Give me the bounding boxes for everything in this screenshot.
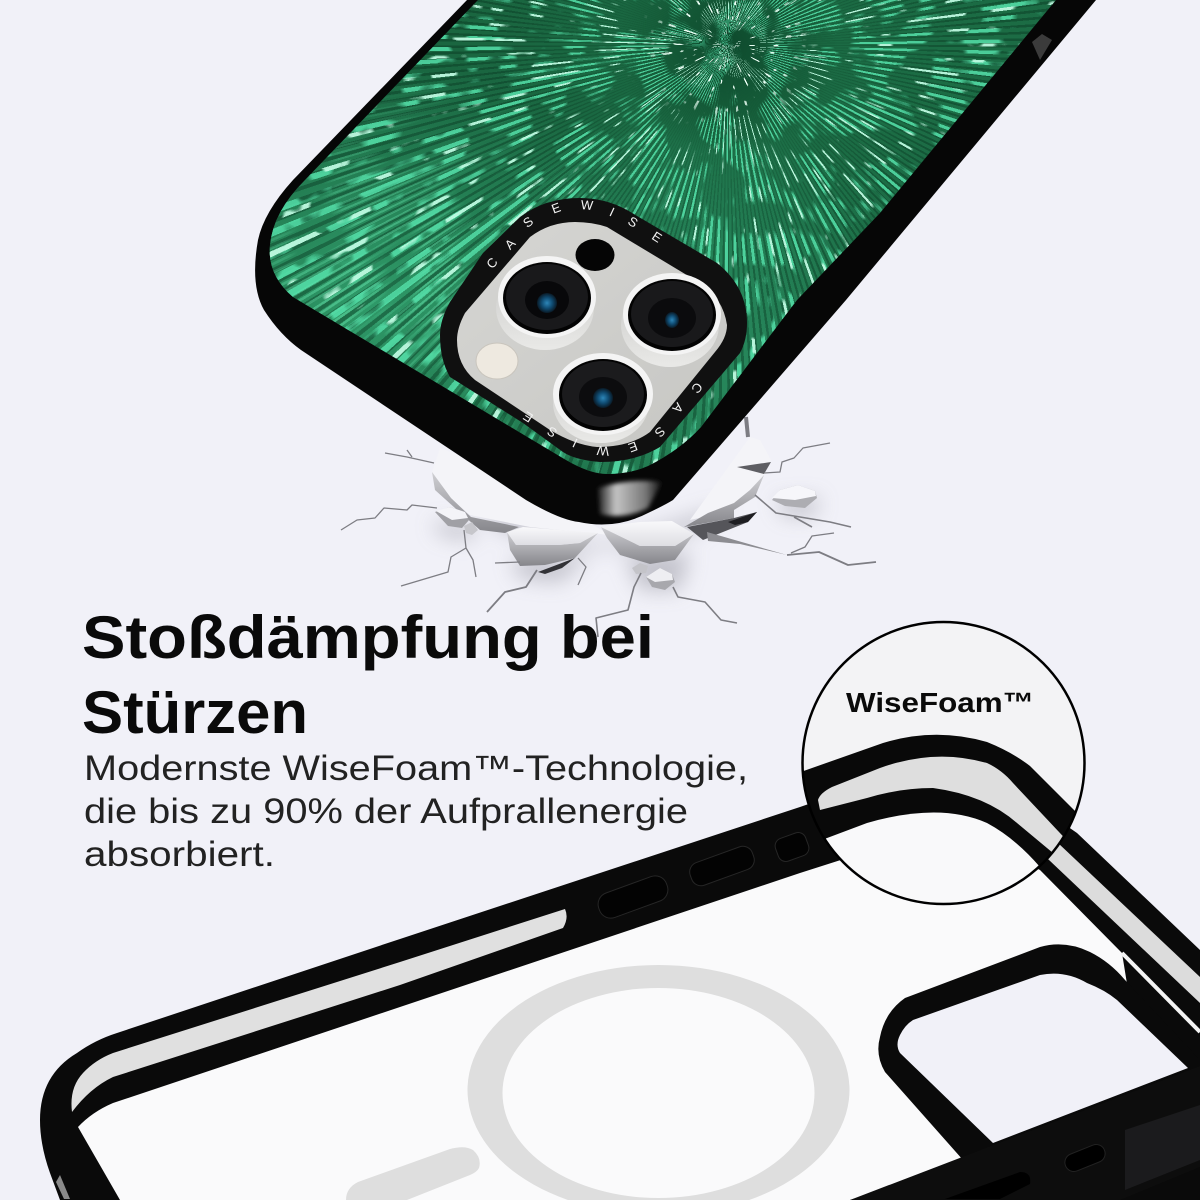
bottom frame band bbox=[850, 1066, 1200, 1200]
phone with green case, seen from the back bbox=[255, 0, 1096, 524]
body text: die bis zu 90% der Aufprallenergie bbox=[84, 792, 688, 831]
microphone hole and flash bbox=[476, 239, 614, 379]
CASEWISE ring lettering: E bbox=[626, 438, 640, 456]
clear back panel bbox=[78, 825, 1190, 1200]
raised wall plates bbox=[432, 437, 771, 535]
cracked wall impact bbox=[340, 416, 876, 638]
lens: right bbox=[621, 273, 721, 367]
bumper bbox=[440, 198, 747, 462]
CASEWISE ring lettering: C bbox=[688, 380, 706, 396]
CASEWISE ring lettering: A bbox=[502, 235, 519, 252]
white highlight along inner frame bbox=[1122, 953, 1200, 1032]
body text bbox=[84, 749, 748, 874]
CASEWISE ring lettering: S bbox=[520, 213, 536, 231]
alignment pill bbox=[346, 1147, 480, 1200]
CASEWISE ring lettering bbox=[483, 197, 706, 459]
CASEWISE ring lettering: A bbox=[669, 400, 687, 416]
clear case, inside view bbox=[40, 620, 1200, 1200]
heading: Stürzen bbox=[82, 679, 308, 746]
translucent gap, right bbox=[1030, 826, 1200, 1003]
magnifier callout circle bbox=[795, 622, 1090, 925]
CASEWISE ring lettering: E bbox=[549, 199, 563, 217]
bottom frame details bbox=[56, 1105, 1200, 1199]
body text: Modernste WiseFoam™-Technologie, bbox=[84, 749, 748, 788]
green light-speed artwork bbox=[270, 0, 1056, 474]
CASEWISE ring lettering: W bbox=[596, 443, 610, 459]
crack lines bbox=[341, 417, 876, 637]
CASEWISE ring lettering: E bbox=[520, 408, 536, 426]
lens: bottom bbox=[553, 353, 653, 443]
camera plate bbox=[457, 222, 727, 447]
CASEWISE ring lettering: E bbox=[649, 228, 665, 246]
side buttons bbox=[595, 830, 811, 922]
translucent gap, left and top bbox=[71, 909, 567, 1112]
camera opening bbox=[898, 974, 1188, 1143]
CASEWISE ring lettering: W bbox=[580, 197, 594, 213]
CASEWISE ring lettering: S bbox=[651, 424, 668, 441]
CASEWISE ring lettering: S bbox=[544, 423, 560, 441]
case body bbox=[255, 0, 1096, 524]
body text: absorbiert. bbox=[84, 835, 275, 874]
camera cut-out frame bbox=[878, 944, 1200, 1160]
heading bbox=[82, 604, 654, 746]
outer black frame bbox=[40, 752, 1200, 1200]
MagSafe ring bbox=[468, 965, 850, 1200]
CASEWISE ring lettering: I bbox=[570, 435, 580, 451]
heading: Stoßdämpfung bei bbox=[82, 604, 654, 671]
CASEWISE ring lettering: S bbox=[625, 213, 641, 231]
broken chunks bbox=[435, 485, 817, 590]
soft shadows bbox=[432, 498, 820, 590]
camera module bbox=[440, 197, 747, 462]
CASEWISE ring lettering: C bbox=[483, 255, 501, 271]
WiseFoam label: WiseFoam™ bbox=[846, 687, 1034, 718]
lens: upper left bbox=[496, 256, 596, 350]
chunk edges and dark fissures bbox=[432, 462, 787, 574]
CASEWISE ring lettering: I bbox=[607, 204, 617, 220]
